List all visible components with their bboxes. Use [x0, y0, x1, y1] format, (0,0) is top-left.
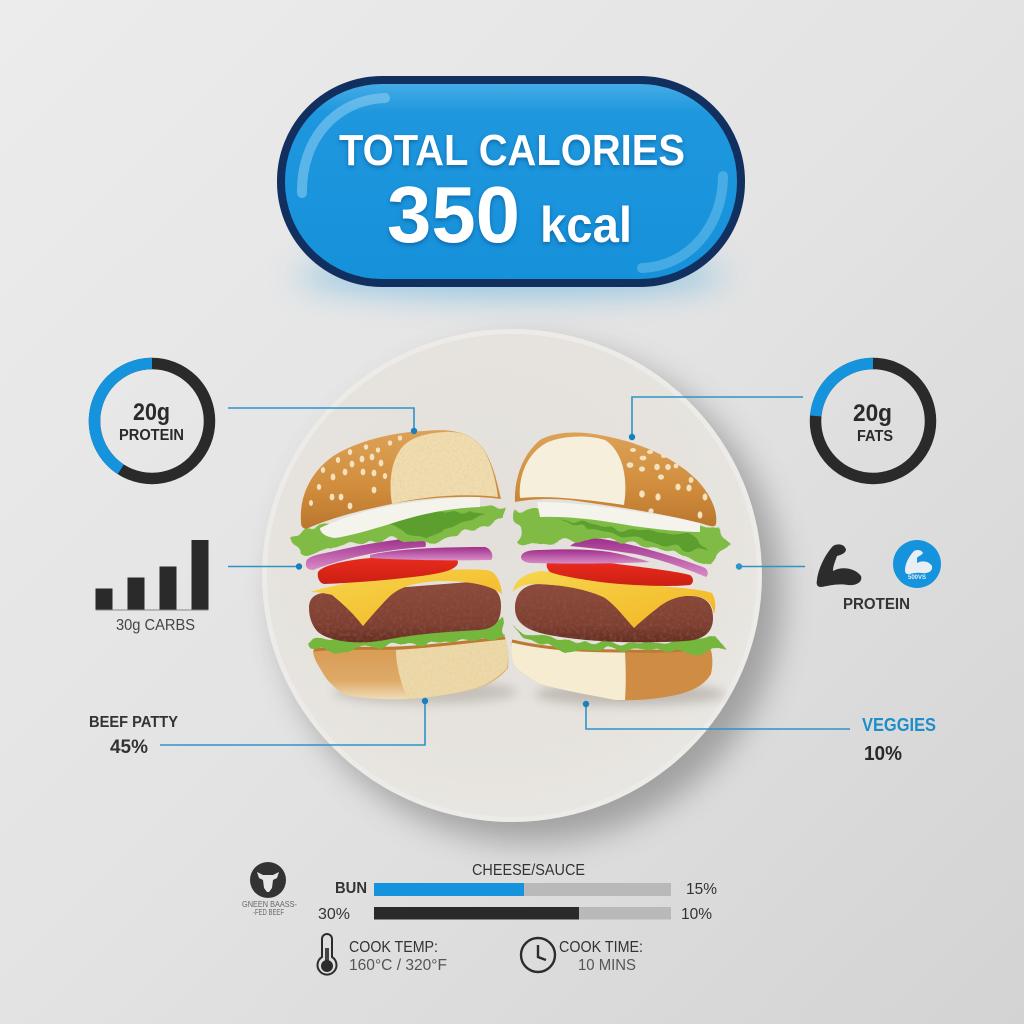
patty — [515, 584, 713, 642]
fats ring — [816, 364, 930, 478]
grass-fed beef badge: -FED BEEF — [253, 908, 284, 917]
beef patty label: BEEF PATTY — [89, 714, 178, 731]
10 percent: 10% — [681, 906, 712, 923]
leader line: protein icon to lettuce — [736, 563, 805, 570]
tomato — [547, 561, 693, 586]
red onion — [521, 538, 708, 577]
lettuce — [292, 506, 503, 553]
leader line: veggies — [583, 701, 850, 729]
badge unit: kcal — [540, 197, 632, 253]
shadow — [535, 682, 725, 706]
icon label: PROTEIN — [843, 596, 910, 613]
top bun — [301, 430, 501, 529]
leader line: beef patty — [160, 698, 428, 745]
protein ring — [94, 364, 210, 478]
cook time: COOK TIME: — [559, 939, 643, 956]
dark bar — [374, 907, 671, 920]
macro bars — [318, 862, 717, 923]
cook temperature: COOK TEMP: — [349, 939, 438, 956]
ring label: FATS — [857, 428, 893, 445]
cook time: 10 MINS — [578, 957, 636, 974]
sesame seeds — [627, 448, 707, 519]
chart label: 30g CARBS — [116, 617, 195, 634]
15 percent: 15% — [686, 881, 717, 898]
cheese — [513, 571, 715, 628]
veggies label: 10% — [864, 743, 902, 765]
leader line: carbs to onion — [228, 563, 302, 570]
badge value: 350 — [387, 170, 520, 259]
badge title: TOTAL CALORIES — [339, 126, 685, 175]
shadow — [333, 680, 517, 704]
leader line: fats ring to bun — [629, 397, 803, 440]
left burger — [292, 430, 517, 704]
cook temperature — [318, 934, 447, 975]
cook temperature: 160°C / 320°F — [349, 957, 447, 974]
sauce — [537, 502, 700, 532]
beef patty label: 45% — [110, 737, 148, 758]
beef patty label — [89, 714, 178, 758]
red onion — [306, 538, 492, 570]
leader line: protein ring to bun — [228, 408, 417, 434]
ring label: PROTEIN — [119, 427, 184, 444]
lettuce — [512, 508, 730, 564]
right burger — [511, 432, 730, 706]
top bun — [515, 432, 716, 526]
icon: dark bicep — [817, 544, 861, 587]
icon: thermometer — [318, 934, 336, 975]
ring value: 20g — [133, 399, 170, 426]
patty — [309, 582, 501, 642]
carbs bar chart — [96, 540, 208, 634]
tomato — [318, 556, 458, 584]
veggies label — [862, 715, 936, 765]
icon: clock — [521, 938, 555, 972]
cook time — [521, 938, 643, 974]
cheese and sauce label: CHEESE/SAUCE — [472, 862, 585, 879]
cheese — [310, 569, 502, 626]
grass-fed beef badge: GNEEN BAASS- — [242, 900, 297, 909]
protein icons — [817, 540, 941, 613]
icon: blue bicep badge: 500VS — [908, 575, 926, 581]
lower lettuce — [512, 624, 725, 655]
plate — [262, 329, 782, 842]
grass-fed beef badge — [242, 862, 297, 917]
veggies label: VEGGIES — [862, 715, 936, 735]
30 percent: 30% — [318, 906, 350, 923]
lower lettuce — [305, 618, 504, 651]
sesame seeds — [309, 435, 402, 509]
sauce — [320, 497, 480, 538]
calories badge — [281, 80, 741, 296]
bun label: BUN — [335, 880, 367, 897]
ring value: 20g — [853, 400, 892, 427]
bottom bun — [313, 637, 508, 699]
bottom bun — [511, 640, 712, 700]
blue bar — [374, 883, 671, 896]
icon: cow — [250, 862, 286, 898]
